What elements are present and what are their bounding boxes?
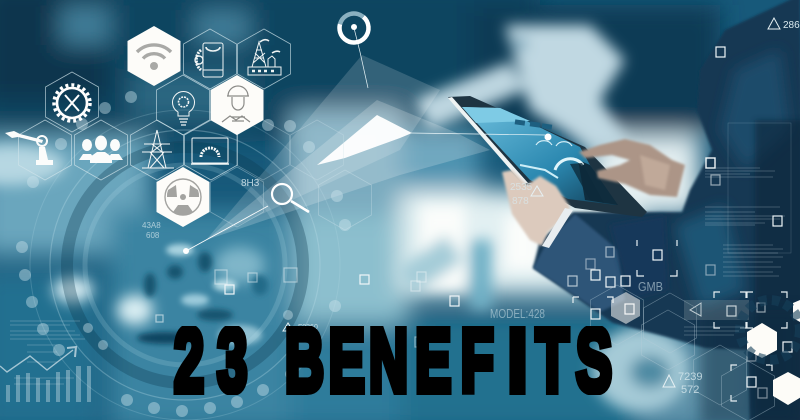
icon: robot arm [5, 131, 53, 165]
businessman suit [533, 0, 800, 420]
white hexagons lower right [611, 292, 800, 405]
tablet computer [448, 96, 647, 217]
title: 23 BENEFITS [174, 310, 612, 410]
icon: three people [79, 136, 123, 163]
hexagon network: outline cells [18, 29, 372, 230]
icon: laptop gear [191, 138, 229, 164]
small data labels: 572 [681, 384, 699, 396]
small data labels: 2535 [510, 182, 533, 193]
translucent light cone [183, 28, 545, 254]
small data labels: F0360 [298, 324, 318, 331]
bar chart with trend arrow [0, 347, 91, 402]
small data labels: 878 [512, 196, 529, 207]
small data labels: 608 [146, 231, 160, 240]
small square markers [156, 47, 792, 398]
icon: light bulb gear [172, 91, 194, 125]
icon: gear with tools [54, 85, 90, 121]
small data labels: 8H3 [241, 178, 260, 189]
small data labels: GMB [638, 279, 663, 294]
icon: tablet gear [195, 43, 223, 77]
triangle markers [283, 18, 780, 387]
white hexagon: wifi [128, 26, 180, 86]
fine print text blocks [10, 123, 791, 384]
icon: oil rig and factory [248, 40, 281, 75]
small data labels: MODEL:428 [490, 306, 545, 321]
right hexagon network [590, 285, 774, 420]
floating dots [16, 91, 351, 417]
white hexagon: radiation [156, 167, 210, 227]
concentric tech rings [30, 110, 340, 420]
hands holding tablet [502, 139, 685, 248]
icon: magnifier [272, 184, 309, 212]
small data labels: 43A8 [142, 221, 161, 230]
icon: transmission tower [142, 130, 174, 168]
dark gear silhouette and data strip [684, 300, 800, 360]
small data labels: 7239 [678, 371, 702, 383]
small data labels [142, 20, 800, 396]
corner brackets [573, 240, 787, 401]
white hexagon: engineer [210, 75, 264, 135]
icon: progress ring [334, 8, 374, 48]
